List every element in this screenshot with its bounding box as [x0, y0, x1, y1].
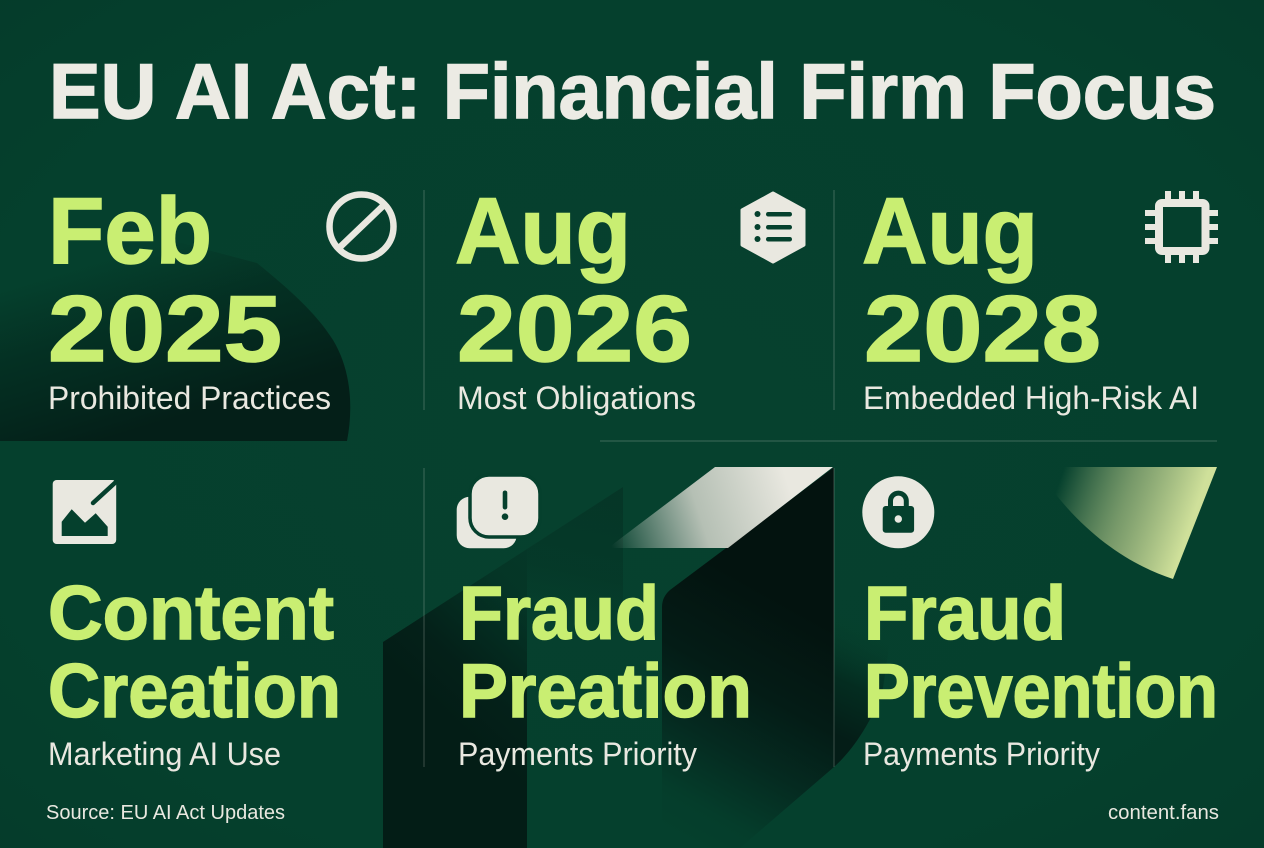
source note: Source: EU AI Act Updates [46, 802, 285, 824]
heading: Aug 2028 [862, 178, 1101, 381]
shape: dark corner behind first date [0, 195, 350, 441]
panel: Aug 2026 [455, 178, 804, 416]
panel: Fraud Preation [457, 475, 752, 772]
panel: Aug 2028 [862, 178, 1218, 416]
icon: hexagon list [742, 193, 804, 262]
panel: Content Creation [48, 480, 341, 772]
heading: Feb 2025: Feb [48, 178, 212, 283]
label: Embedded High-Risk AI: Embedded High-Risk AI [863, 380, 1199, 416]
panel: Fraud Prevention [862, 476, 1218, 772]
heading: Feb 2025: 2025 [48, 276, 282, 381]
heading: Content Creation: Content [48, 571, 334, 656]
heading: Aug 2026: Aug [455, 178, 631, 283]
heading: Fraud Prevention: Prevention [864, 649, 1218, 734]
heading: Aug 2026 [455, 178, 692, 381]
label: Payments Priority: Payments Priority [863, 736, 1100, 772]
icon: microchip [1145, 191, 1218, 263]
heading: Fraud Prevention [864, 571, 1218, 734]
heading: Fraud Preation [459, 571, 752, 734]
heading: Fraud Prevention: Fraud [864, 571, 1066, 656]
label: Payments Priority: Payments Priority [458, 736, 697, 772]
heading: Content Creation: Creation [48, 649, 341, 734]
heading: Content Creation [48, 571, 341, 734]
icon: padlock badge [862, 476, 934, 548]
heading: Fraud Preation: Fraud [459, 571, 659, 656]
title: EU AI Act: Financial Firm Focus [49, 47, 1216, 135]
shape: dark right ribbon [662, 468, 890, 848]
heading: Aug 2028: 2028 [864, 276, 1101, 381]
icon: image with pen [53, 480, 117, 544]
site credit: content.fans [1108, 802, 1219, 824]
shape: pale parallelogram [608, 467, 833, 548]
label: Prohibited Practices: Prohibited Practices [48, 380, 331, 416]
heading: Fraud Preation: Preation [459, 649, 752, 734]
label: Most Obligations: Most Obligations [457, 380, 696, 416]
shape: lime curved wedge [1047, 467, 1217, 579]
shape: dark left ribbon [383, 487, 623, 848]
heading: Aug 2028: Aug [862, 178, 1038, 283]
icon: alert messages [457, 475, 540, 548]
label: Marketing AI Use: Marketing AI Use [48, 736, 281, 772]
icon: prohibited sign [330, 194, 394, 258]
heading: Feb 2025 [48, 178, 282, 381]
heading: Aug 2026: 2026 [457, 276, 692, 381]
panel: Feb 2025 [48, 178, 394, 416]
